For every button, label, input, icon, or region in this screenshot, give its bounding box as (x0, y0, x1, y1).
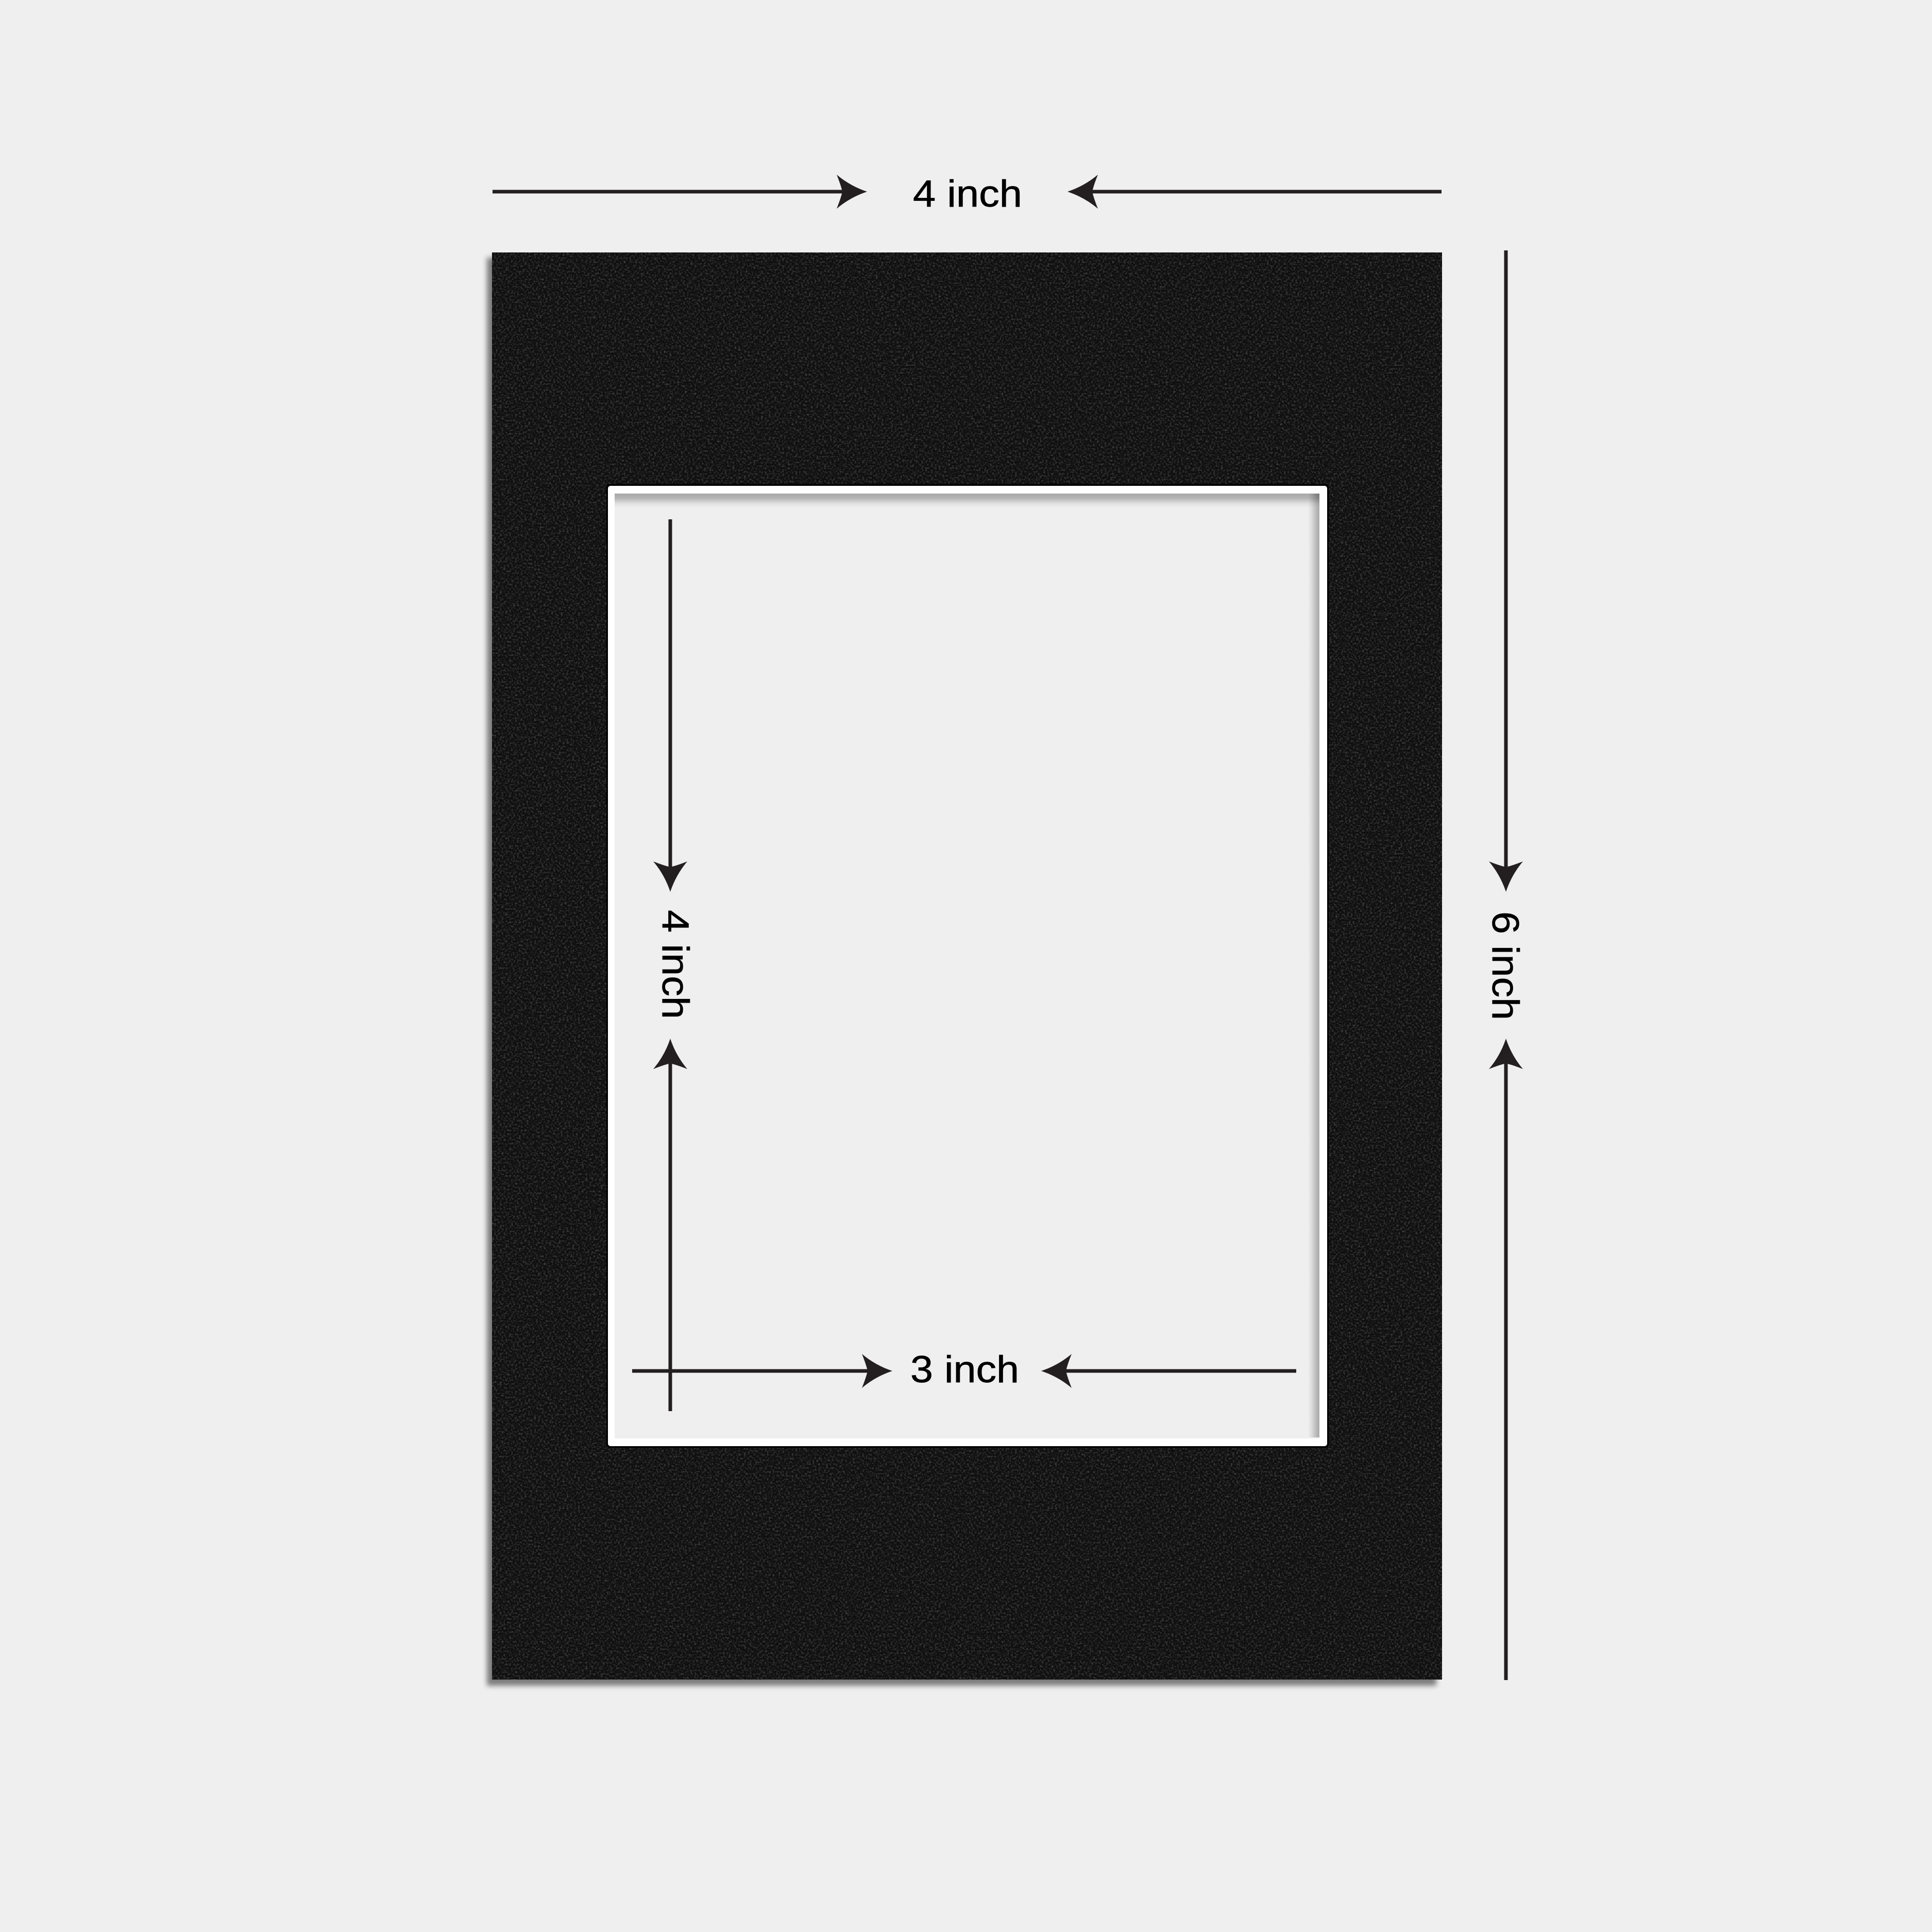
opening inner area (615, 494, 1319, 1438)
inner dimension: opening width 3 inch (632, 1349, 1296, 1391)
arrow: inner lower pointing up (653, 1039, 687, 1411)
mat drop shadow (487, 258, 1436, 1686)
arrow: inner upper pointing down (653, 519, 687, 892)
opening right inner shadow (1308, 494, 1319, 1437)
top dimension: mat width 4 inch (493, 173, 1442, 215)
arrow: top right pointing left (1067, 175, 1442, 209)
right dimension: mat height 6 inch (1484, 250, 1526, 1680)
opening top inner shadow (615, 494, 1319, 507)
label: 6 inch height: 6 inch (1484, 911, 1526, 1020)
arrow: right upper pointing down (1489, 250, 1523, 892)
label: 3 inch opening width: 3 inch (910, 1349, 1019, 1391)
label: 4 inch opening height: 4 inch (654, 910, 696, 1019)
panel: black mat board (487, 252, 1442, 1686)
inner dimension: opening height 4 inch (653, 519, 696, 1411)
arrow: inner left pointing right (632, 1354, 892, 1388)
panel: mat opening (606, 484, 1329, 1448)
arrow: top left pointing right (493, 175, 867, 209)
mat surface (492, 252, 1442, 1680)
arrow: inner right pointing left (1041, 1354, 1296, 1388)
opening white bevel (608, 486, 1327, 1446)
arrow: right lower pointing up (1489, 1039, 1523, 1680)
mat paper grain (492, 252, 1442, 1680)
opening dark cut edge (606, 484, 1329, 1448)
label: 4 inch width: 4 inch (913, 173, 1022, 215)
